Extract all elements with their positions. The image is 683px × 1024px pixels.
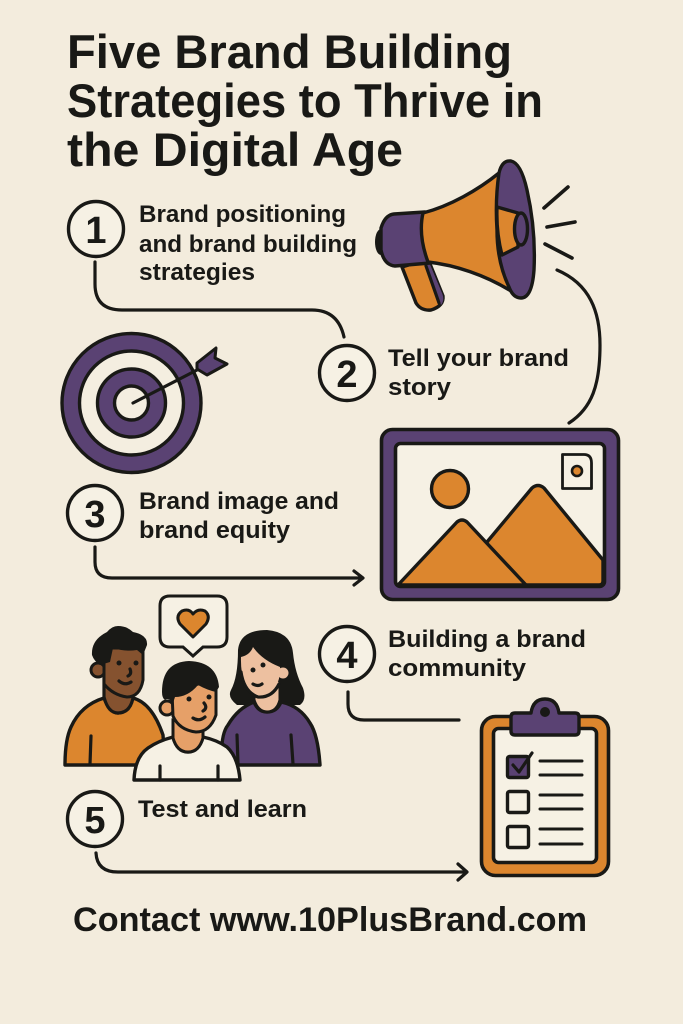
- step 4 number badge: [320, 626, 374, 682]
- speech bubble with heart: [160, 596, 227, 656]
- contact line: Contact www.10PlusBrand.com: [73, 901, 587, 939]
- sun: [432, 470, 468, 508]
- list lines: [540, 761, 582, 844]
- photo badge: [562, 454, 592, 488]
- step 3 number badge: 3: [84, 494, 106, 536]
- megaphone bell: [496, 161, 534, 298]
- title: [67, 25, 543, 176]
- left person: [65, 626, 165, 765]
- title: Five Brand Building: [67, 25, 512, 78]
- step 3 number badge: [68, 486, 122, 540]
- title: the Digital Age: [67, 123, 403, 176]
- clip: [511, 699, 579, 735]
- step 1 label: strategies: [139, 259, 255, 286]
- step 4 number badge: 4: [336, 635, 358, 677]
- icon: megaphone: [375, 161, 575, 310]
- connector arrow: step 5 to clipboard: [96, 853, 467, 880]
- connector: step 4 to clipboard: [348, 692, 459, 720]
- icon: three people with heart bubble: [65, 596, 320, 780]
- step 4 label: community: [388, 655, 527, 682]
- large mountain: [487, 486, 603, 585]
- step 1 number badge: [68, 202, 124, 256]
- megaphone end cap: [375, 229, 387, 255]
- step 1 label: and brand building: [139, 231, 357, 258]
- empty boxes: [508, 792, 528, 812]
- step 3 label: brand equity: [139, 517, 291, 544]
- connector arrow: step 3 to image: [95, 547, 363, 585]
- icon: clipboard checklist: [482, 699, 608, 876]
- sound rays: [544, 187, 575, 258]
- step 1 label: [139, 201, 357, 286]
- arrow fletching: [197, 348, 227, 375]
- small mountain: [398, 520, 526, 585]
- step 2 label: story: [388, 374, 452, 401]
- step 5 number badge: 5: [84, 800, 106, 842]
- step 1 label: Brand positioning: [139, 201, 346, 228]
- step 5 label: Test and learn: [138, 796, 307, 823]
- megaphone inner throat: [497, 207, 518, 255]
- step 2 label: [388, 345, 569, 401]
- step 2 number badge: 2: [336, 354, 358, 396]
- megaphone handle: [402, 259, 443, 310]
- icon: target with arrow: [62, 334, 227, 472]
- title: Strategies to Thrive in: [67, 74, 543, 127]
- connector: megaphone to image: [557, 270, 600, 423]
- step 2 number badge: [320, 346, 374, 400]
- megaphone body: [381, 212, 430, 266]
- arrow shaft: [133, 370, 197, 403]
- step 4 label: [388, 626, 586, 682]
- megaphone cone: [421, 173, 511, 291]
- icon: picture frame: [382, 430, 618, 600]
- step 4 label: Building a brand: [388, 626, 586, 653]
- step 5 number badge: [68, 792, 122, 846]
- step 3 label: [139, 488, 339, 544]
- step 1 number badge: 1: [85, 210, 107, 252]
- step 2 label: Tell your brand: [388, 345, 569, 372]
- right person: [222, 630, 320, 765]
- checked box: [508, 756, 528, 778]
- step 3 label: Brand image and: [139, 488, 339, 515]
- centre person: [134, 661, 240, 780]
- connector: step 1 to step 2: [95, 262, 344, 337]
